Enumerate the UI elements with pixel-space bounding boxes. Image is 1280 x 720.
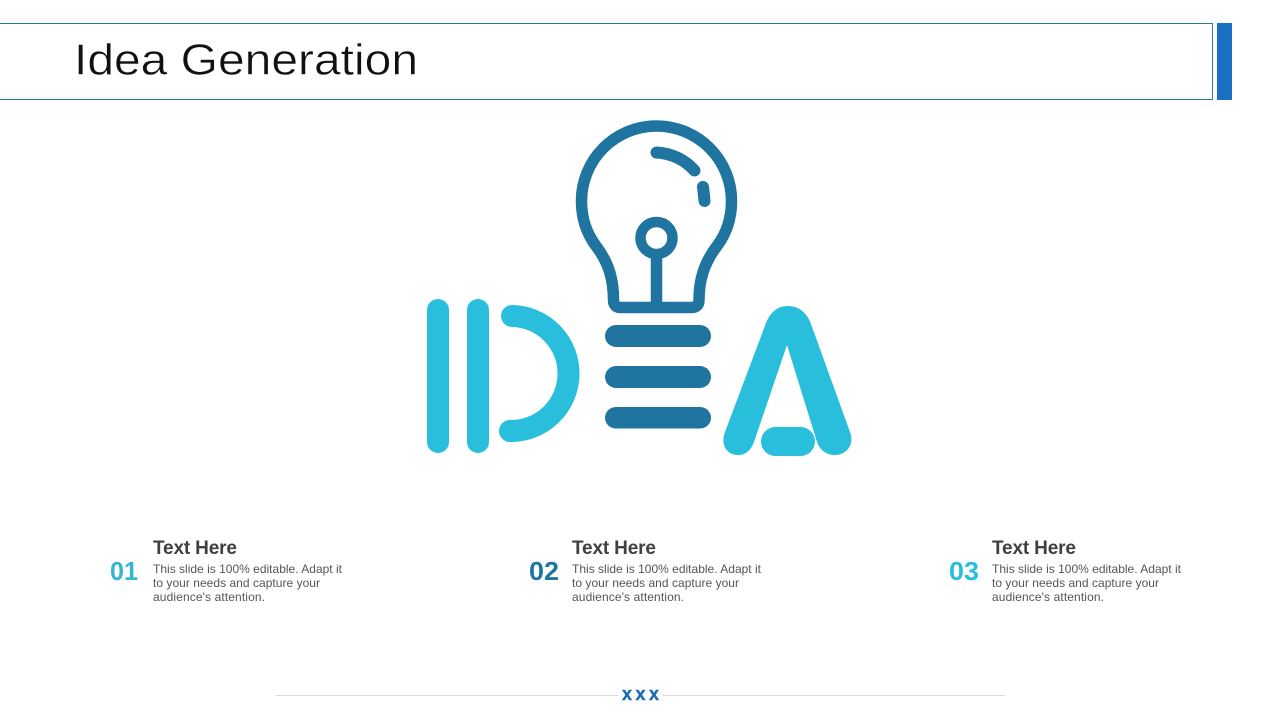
footer line — [276, 694, 1005, 696]
letter E bars — [605, 325, 711, 428]
description: This slide is 100% editable. Adapt it — [153, 562, 343, 576]
description — [572, 562, 762, 604]
letter A crossbar — [761, 427, 815, 456]
description: audience's attention. — [992, 590, 1104, 604]
description: audience's attention. — [572, 590, 684, 604]
title: Idea Generation — [74, 36, 418, 84]
description: to your needs and capture your — [153, 576, 320, 590]
word: IDEA — [427, 299, 851, 456]
description: This slide is 100% editable. Adapt it — [992, 562, 1182, 576]
description: This slide is 100% editable. Adapt it — [572, 562, 762, 576]
header band — [0, 23, 1232, 100]
letter D bowl — [510, 316, 569, 431]
letter A — [723, 306, 851, 455]
description: to your needs and capture your — [992, 576, 1159, 590]
icon: light bulb — [582, 126, 732, 308]
footer marker: xxx — [622, 684, 659, 704]
heading: Text Here — [153, 538, 237, 559]
letter I — [427, 299, 449, 453]
heading: Text Here — [992, 538, 1076, 559]
description: to your needs and capture your — [572, 576, 739, 590]
number 02: 02 — [529, 556, 559, 586]
description — [153, 562, 343, 604]
number 01: 01 — [110, 556, 138, 586]
item 03 — [949, 538, 1182, 604]
heading: Text Here — [572, 538, 656, 559]
item 01 — [110, 538, 343, 604]
description — [992, 562, 1182, 604]
item 02 — [529, 538, 762, 604]
description: audience's attention. — [153, 590, 265, 604]
number 03: 03 — [949, 556, 979, 586]
letter D stem — [467, 299, 489, 453]
